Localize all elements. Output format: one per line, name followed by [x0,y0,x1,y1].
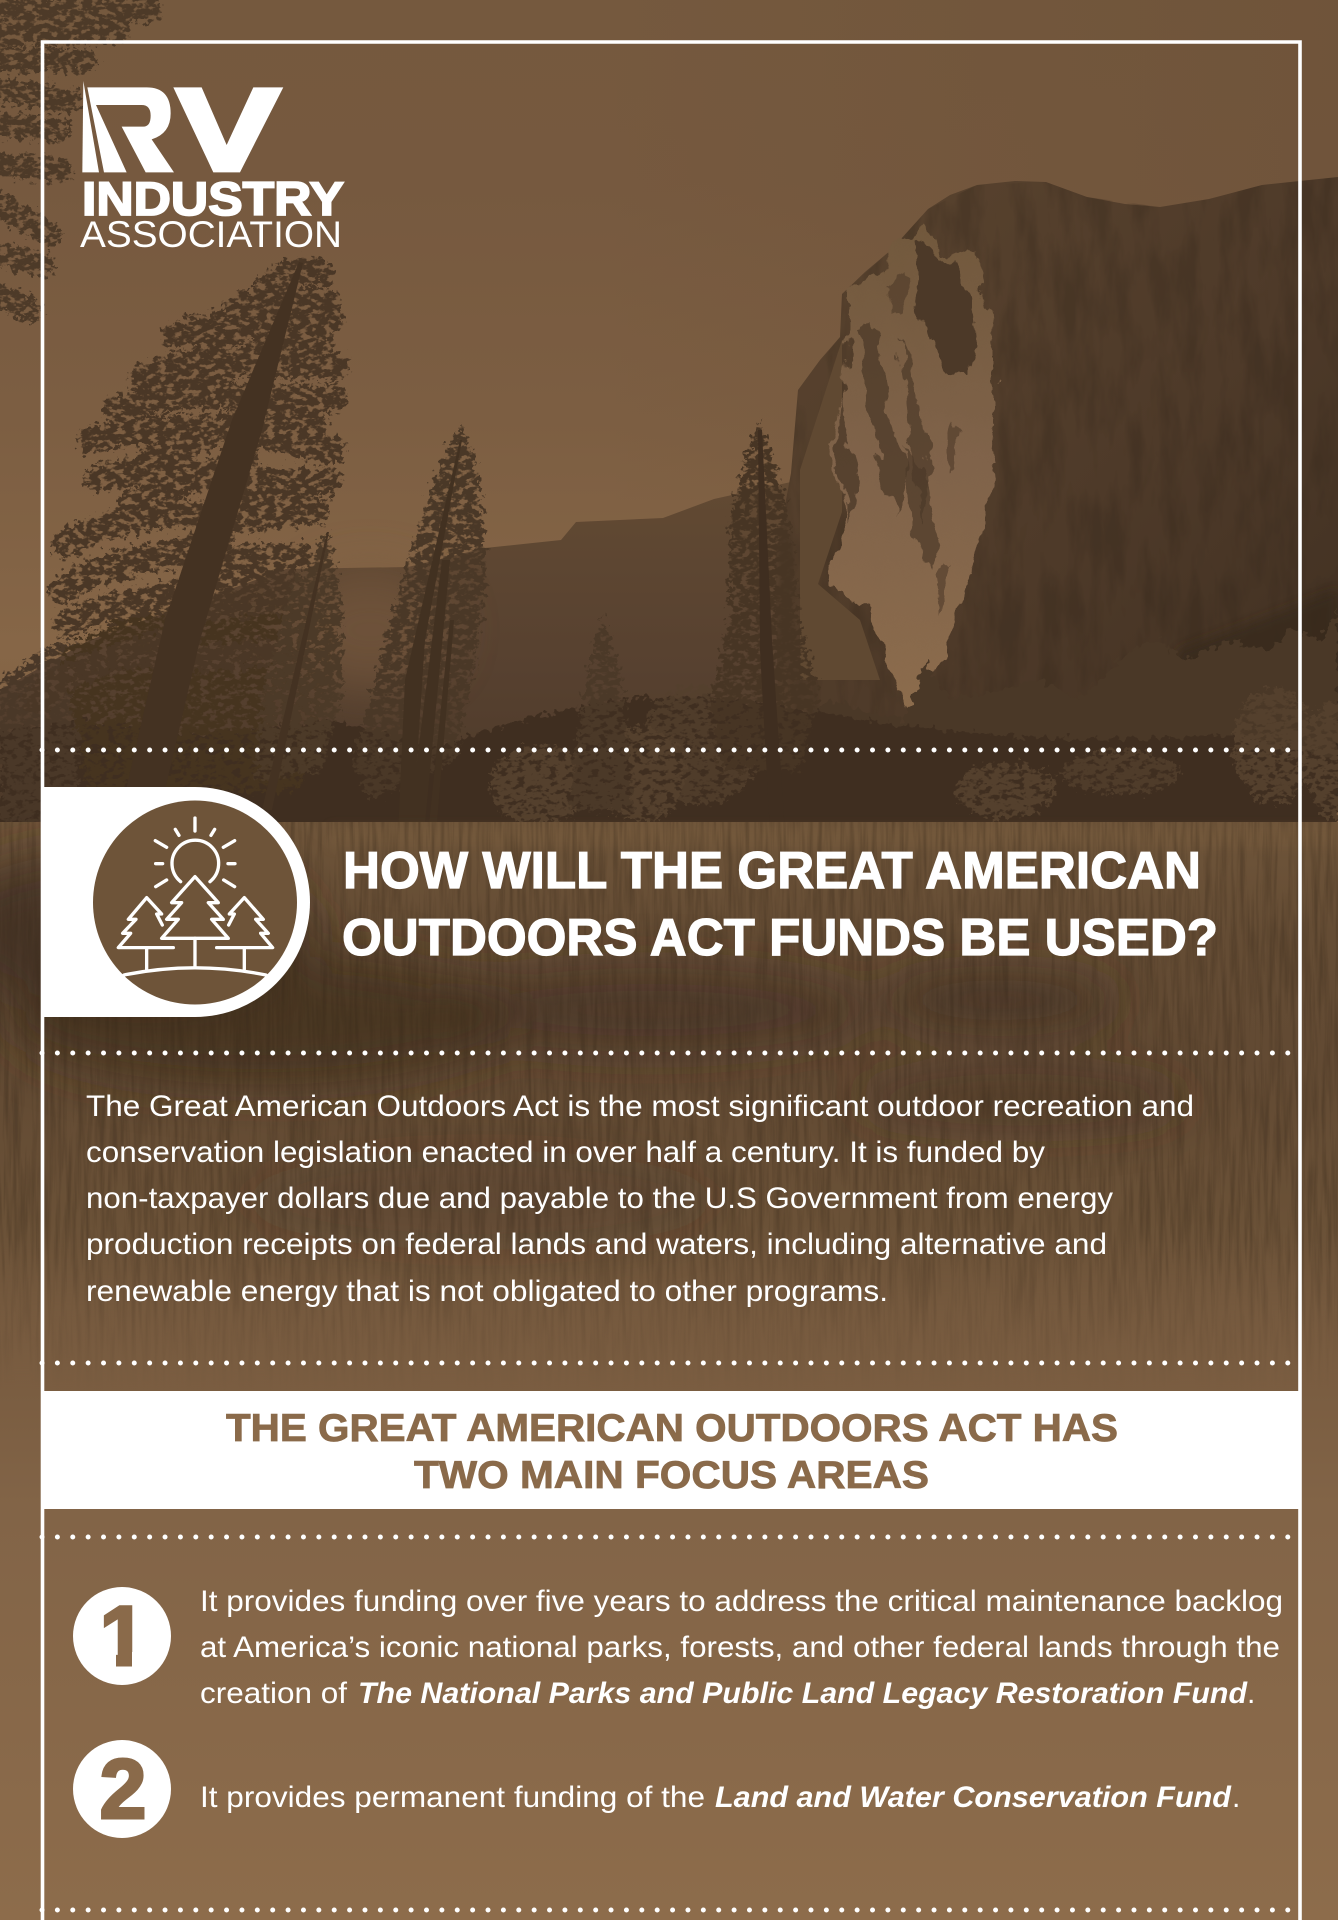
intro paragraph [86,1090,1194,1308]
big pine foliage [36,270,336,700]
right pine trunk [758,430,785,832]
lower brown field [0,1391,1338,1920]
ground [124,968,266,975]
meadow [0,822,1338,1391]
sunlit cliff face with cracks [824,221,995,715]
divider [42,1908,1298,1912]
twin pine foliage [352,424,485,800]
main heading: HOW WILL THE GREAT AMERICAN [343,842,1201,900]
divider [42,1050,1298,1056]
meadow fade [0,1240,1338,1391]
rock streak texture [775,177,1338,800]
divider [42,1534,1298,1540]
item 1 text: creation of [200,1677,348,1710]
item 1 text [200,1585,1283,1710]
item 2 text: It provides permanent funding of the [200,1781,705,1814]
icon: sun and trees [93,800,297,1004]
item 1 text: at America’s iconic national parks, forests, and other federal lands through the [200,1631,1280,1664]
grass texture [0,822,1338,1391]
icon badge: white tab [44,787,310,1017]
pine trees [118,877,273,969]
top left branches [0,10,150,310]
dark forest band [0,695,1338,832]
item 1 text: . [1247,1677,1255,1710]
divider [42,748,1298,752]
thin pine trunk [262,532,329,810]
band heading: TWO MAIN FOCUS AREAS [414,1454,929,1497]
twin pine trunks [398,440,462,834]
item 1 [73,1585,1283,1710]
main heading: OUTDOORS ACT FUNDS BE USED? [342,909,1218,967]
logo word industry: INDUSTRY [82,172,344,225]
item 2 text [200,1781,1240,1814]
band heading [226,1407,1118,1497]
logo word association: ASSOCIATION [80,214,342,255]
divider [42,1360,1298,1366]
item 1 text: The National Parks and Public Land Legacy Restoration Fund [358,1677,1248,1710]
haze in front of ridge [290,570,450,690]
distant conifers right [780,610,1338,810]
number badge 1: 1 [100,1589,146,1683]
intro paragraph: non-taxpayer dollars due and payable to the U.S Government from energy [86,1182,1113,1215]
logo: rv industry association [80,81,344,255]
right pine [710,422,818,770]
thin pine [255,532,342,780]
sun [155,818,235,887]
number badge 2 [73,1740,171,1838]
item 1 text: It provides funding over five years to address the critical maintenance backlog [200,1585,1283,1618]
intro paragraph: conservation legislation enacted in over half a century. It is funded by [86,1136,1045,1169]
item 2 text: Land and Water Conservation Fund [715,1781,1232,1814]
band heading: THE GREAT AMERICAN OUTDOORS ACT HAS [226,1407,1118,1450]
number badge 2: 2 [100,1742,146,1836]
rock shadow lower right [1120,590,1338,800]
item 2 text: . [1232,1781,1240,1814]
number badge 1 [73,1587,171,1685]
small mid conifer [570,616,632,810]
far ridge [0,480,900,820]
rock side shade [800,340,880,680]
white band [44,1391,1299,1509]
intro paragraph: production receipts on federal lands and waters, including alternative and [86,1228,1107,1261]
main heading [342,842,1218,967]
intro paragraph: renewable energy that is not obligated to other programs. [86,1275,888,1308]
lower understory tree [60,590,340,800]
meadow light strip [330,826,1338,848]
big pine trunk [126,262,303,790]
left edge trees [0,640,80,830]
el capitan rock [775,177,1338,800]
item 2 [73,1740,1240,1838]
meadow dark patches [0,850,1190,1250]
logo mark rv [82,81,283,172]
intro paragraph: The Great American Outdoors Act is the most significant outdoor recreation and [86,1090,1194,1123]
oak trees lit [490,685,1338,825]
